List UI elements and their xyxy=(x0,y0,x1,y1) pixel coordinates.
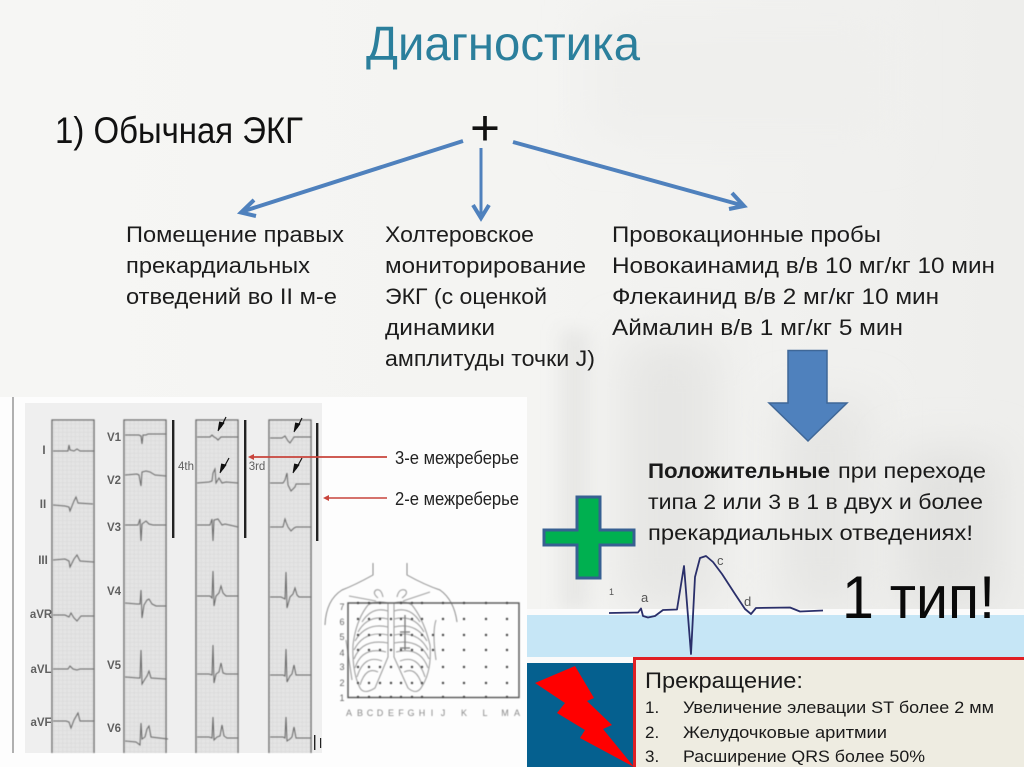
lead group bars xyxy=(172,420,321,750)
arrow: to right precordial leads xyxy=(241,141,463,216)
grid column letters: G xyxy=(407,708,415,718)
text block: positive criteria: типа 2 или 3 в 1 в двух и более xyxy=(648,491,983,514)
ECG strips xyxy=(52,420,311,753)
black pointer arrows xyxy=(218,417,302,473)
arrow: to provocative tests xyxy=(513,142,744,209)
text block: right precordial leads: Помещение правых xyxy=(126,222,345,247)
text block: right precordial leads xyxy=(126,222,345,309)
list item 2: Желудочковые аритмии xyxy=(683,723,887,742)
electrode dots xyxy=(357,602,508,698)
lead labels: III xyxy=(38,555,48,567)
arrow: to Holter monitoring xyxy=(473,148,489,218)
text block: Holter monitoring: Холтеровское xyxy=(385,222,534,247)
panel: termination criteria: Прекращение: xyxy=(645,668,803,693)
lead labels: 3rd xyxy=(249,461,265,473)
lead labels: V6 xyxy=(107,723,121,735)
ECG type 1 waveform: d xyxy=(744,594,751,609)
red arrow: 2nd intercostal xyxy=(323,495,387,501)
grid column letters: M xyxy=(501,708,509,718)
text block: positive criteria: прекардиальных отведениях! xyxy=(648,522,973,545)
grid column letters: K xyxy=(461,708,467,718)
text block: right precordial leads: прекардиальных xyxy=(126,253,311,278)
rib cage xyxy=(346,590,436,692)
grid column letters: F xyxy=(398,708,404,718)
grid row numbers xyxy=(339,602,345,703)
grid column letters xyxy=(346,708,520,718)
ECG type 1 waveform: 1 xyxy=(609,587,614,597)
grid column letters: E xyxy=(388,708,394,718)
grid column letters: H xyxy=(419,708,425,718)
lead labels: V4 xyxy=(107,586,122,598)
label: type 1: 1 тип! xyxy=(842,564,995,631)
list item 2: 2. xyxy=(645,723,659,742)
grid column letters: L xyxy=(482,708,488,718)
grid column letters: C xyxy=(367,708,374,718)
lead labels: aVF xyxy=(30,717,52,729)
grid row numbers: 1 xyxy=(339,693,345,703)
lead labels: V2 xyxy=(107,475,121,487)
lead labels: I xyxy=(42,445,46,457)
text block: right precordial leads: отведений во II м-е xyxy=(126,284,337,309)
grid row numbers: 7 xyxy=(339,602,345,612)
grid column letters: B xyxy=(357,708,363,718)
lead labels: V1 xyxy=(107,432,122,444)
panel: termination criteria xyxy=(634,658,1024,767)
lead labels: V5 xyxy=(107,660,122,672)
label: 3rd intercostal: 3-е межреберье xyxy=(395,448,519,468)
lead labels: aVL xyxy=(30,664,52,676)
list item 3: 3. xyxy=(645,747,659,766)
grid row numbers: 2 xyxy=(339,678,345,688)
text block: provocative tests: Аймалин в/в 1 мг/кг 5 мин xyxy=(612,315,903,340)
text block: Holter monitoring: мониторирование xyxy=(385,253,586,278)
grid column letters: I xyxy=(431,708,433,718)
chest electrode map xyxy=(325,563,520,718)
ECG traces xyxy=(53,434,311,745)
text block: provocative tests: Провокационные пробы xyxy=(612,222,881,247)
grid column letters: A xyxy=(514,708,520,718)
body outline xyxy=(325,563,457,625)
text block: provocative tests xyxy=(612,222,995,340)
list item 1: Увеличение элевации ST более 2 мм xyxy=(683,698,994,717)
text block: provocative tests: Новокаинамид в/в 10 мг/кг 10 мин xyxy=(612,253,995,278)
lead labels xyxy=(30,432,265,735)
text block: positive criteria xyxy=(648,460,986,545)
grid column letters: D xyxy=(377,708,384,718)
panel: ECG figure xyxy=(0,397,527,767)
text block: Holter monitoring: ЭКГ (с оценкой xyxy=(385,284,547,309)
electrode grid frame xyxy=(348,603,519,698)
icon: red lightning bolt xyxy=(535,666,634,767)
list item 1: 1. xyxy=(645,698,659,717)
grid column letters: J xyxy=(441,708,445,718)
text block: positive criteria: Положительные xyxy=(648,460,830,483)
heading: regular ECG: 1) Обычная ЭКГ xyxy=(55,110,303,151)
grid row numbers: 3 xyxy=(339,662,345,672)
lead labels: aVR xyxy=(30,609,53,621)
title: Диагностика xyxy=(366,18,640,71)
grid row numbers: 5 xyxy=(339,632,345,642)
lead labels: 4th xyxy=(178,461,194,473)
text block: Holter monitoring xyxy=(385,222,595,371)
grid row numbers: 4 xyxy=(339,648,345,658)
icon: green plus xyxy=(544,497,634,578)
ECG type 1 waveform xyxy=(609,553,823,654)
text block: positive criteria: при переходе xyxy=(838,460,986,483)
ECG type 1 waveform: a xyxy=(641,590,649,605)
text block: Holter monitoring: амплитуды точки J) xyxy=(385,346,595,371)
red arrow: 3rd intercostal xyxy=(248,454,387,460)
plus sign: + xyxy=(470,100,500,156)
icon: down block arrow xyxy=(769,350,847,441)
grid row numbers: 6 xyxy=(339,617,345,627)
ECG type 1 waveform: c xyxy=(717,553,724,568)
text block: Holter monitoring: динамики xyxy=(385,315,495,340)
grid column letters: A xyxy=(346,708,352,718)
text block: provocative tests: Флекаинид в/в 2 мг/кг 10 мин xyxy=(612,284,939,309)
lead labels: II xyxy=(40,499,46,511)
list item 3: Расширение QRS более 50% xyxy=(683,747,925,766)
label: 2nd intercostal: 2-е межреберье xyxy=(395,489,519,509)
lead labels: V3 xyxy=(107,522,121,534)
